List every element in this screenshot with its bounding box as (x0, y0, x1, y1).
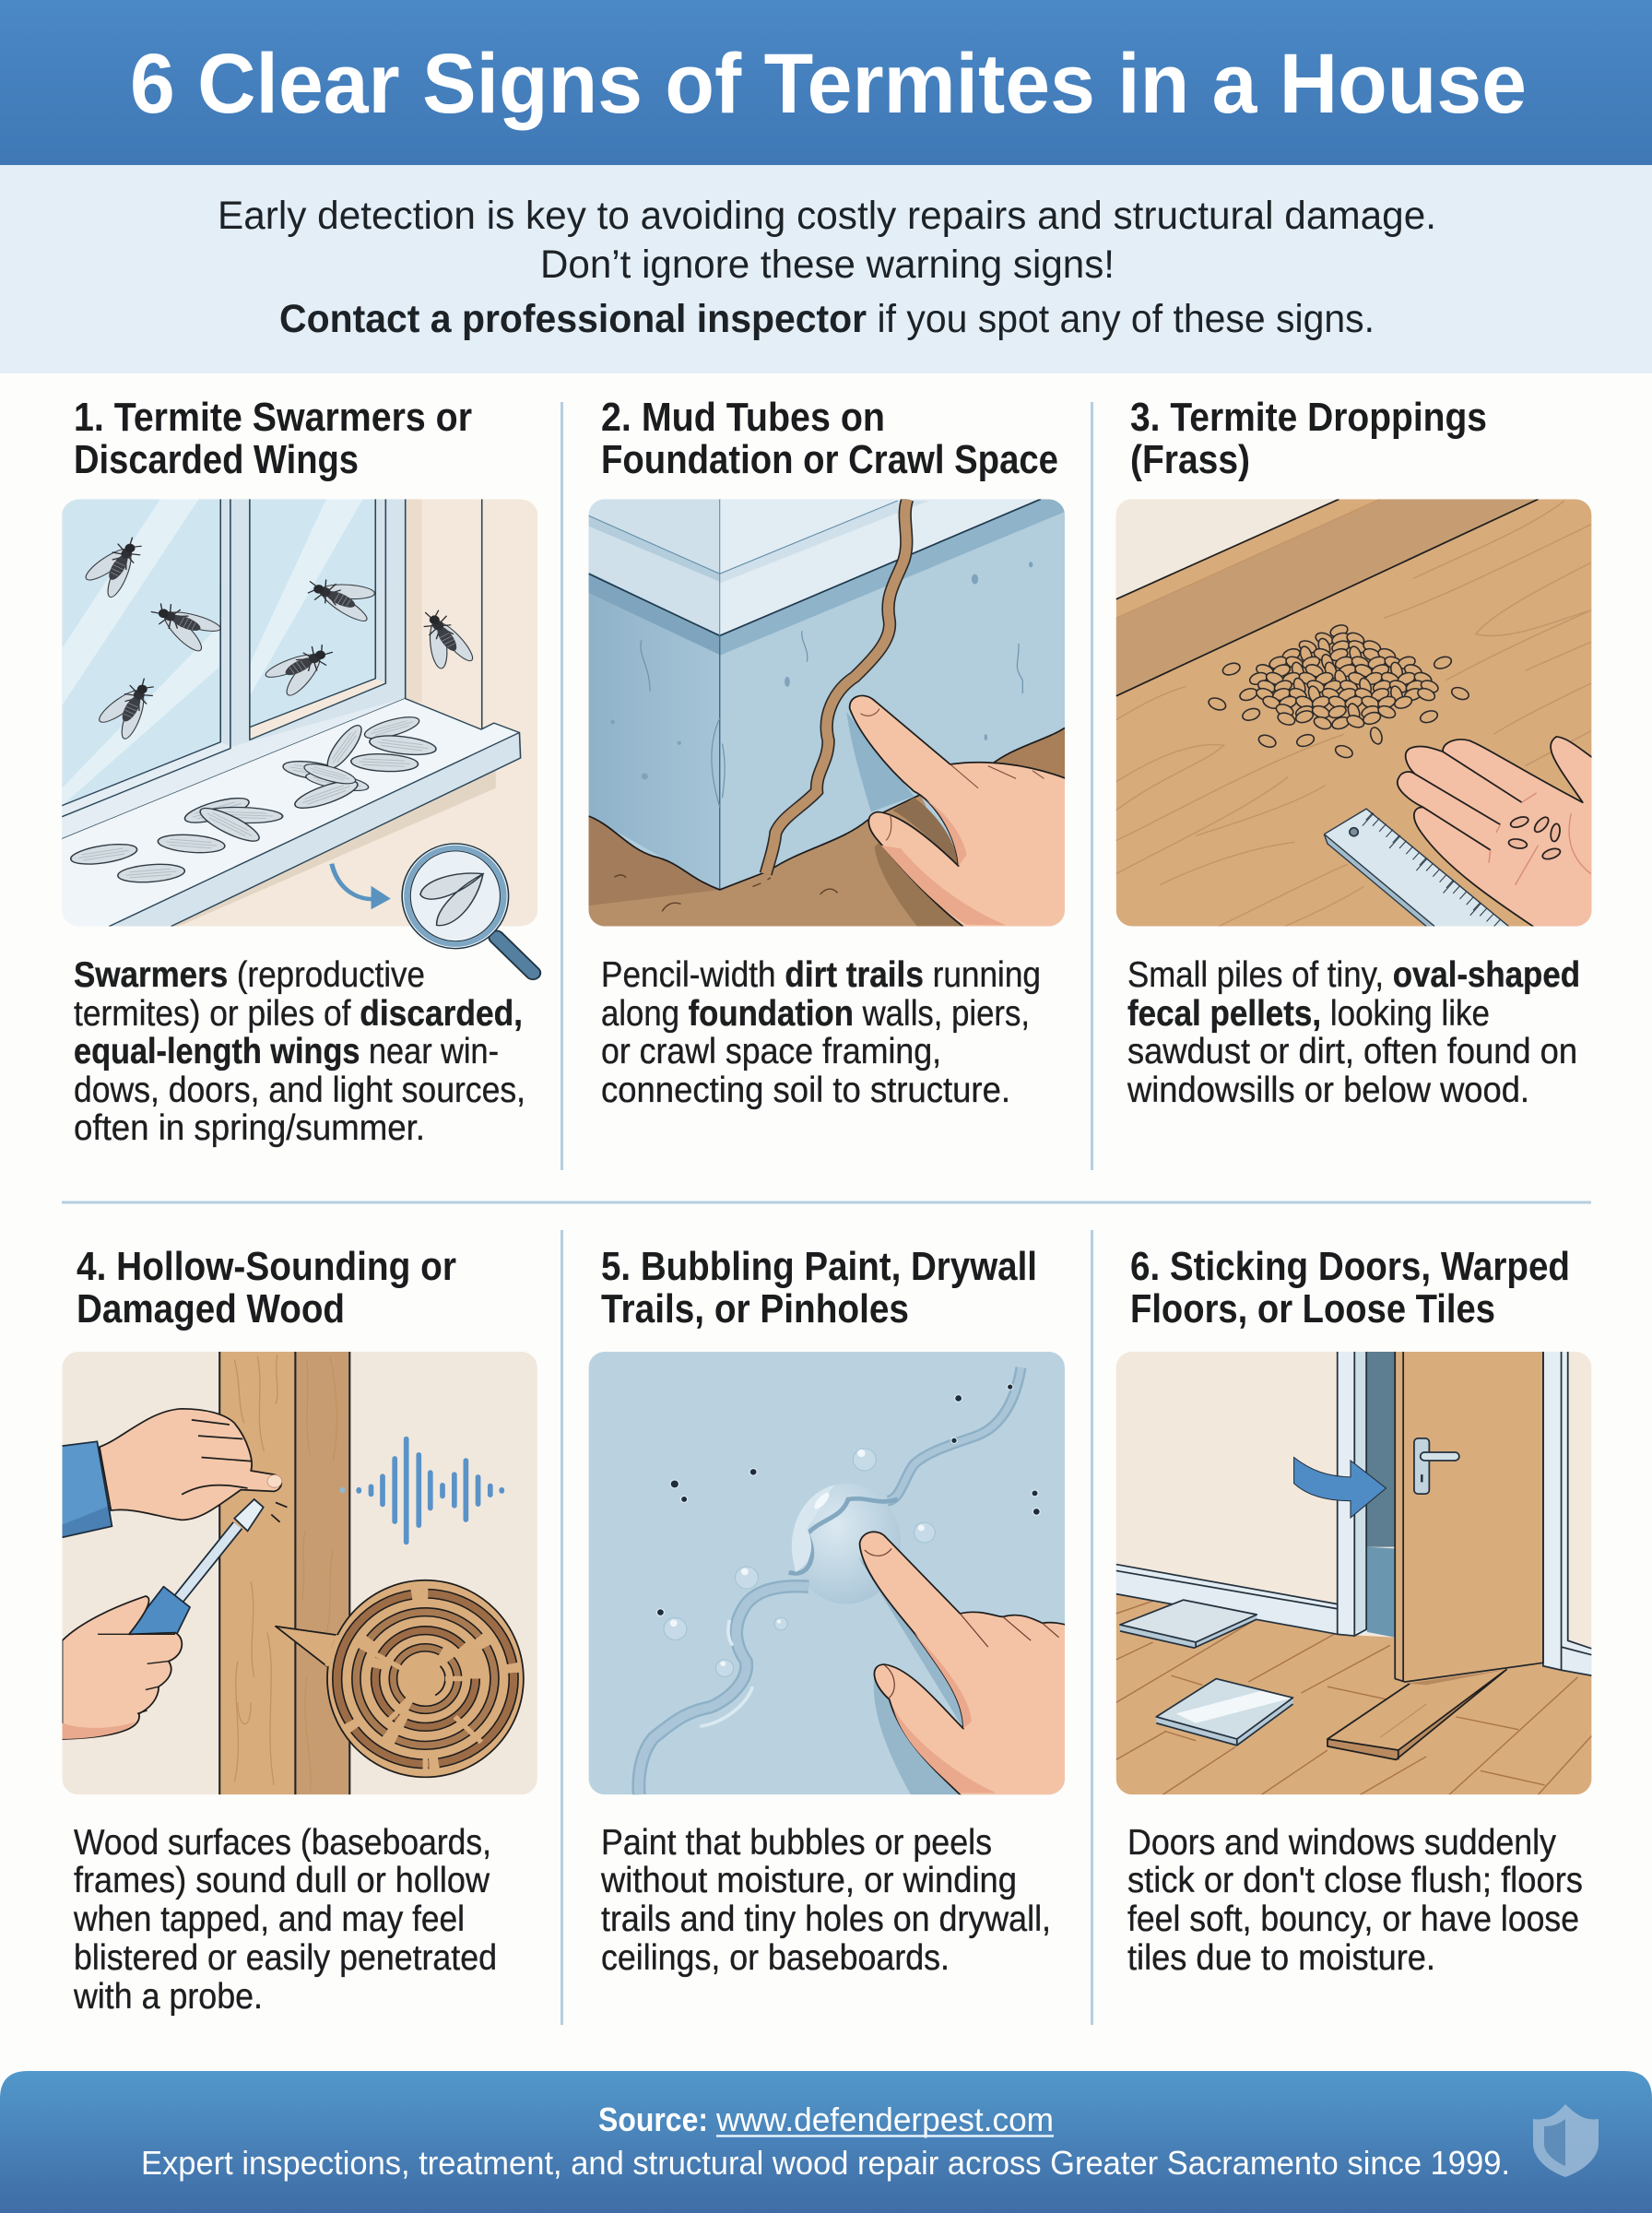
card 1 text: Swarmers (reproductive (74, 955, 425, 995)
card 3 text: Small piles of tiny, oval-shaped (1127, 955, 1580, 995)
icon: door handle (1414, 1438, 1459, 1494)
card 2 text: Pencil-width dirt trails running (601, 955, 1041, 995)
card 3 text: windowsills or below wood. (1127, 1071, 1529, 1110)
card 1 text: equal-length wings near win- (74, 1032, 499, 1071)
icon: sound wave (342, 1439, 502, 1542)
card 4 text: blistered or easily penetrated (74, 1938, 497, 1978)
card 2 text: connecting soil to structure. (601, 1071, 1010, 1110)
illustration: frass pile on wood, ruler and hand (1115, 499, 1591, 926)
illustration: warped door, floor and loose tiles (1115, 1352, 1591, 1794)
illustration: mud tube on foundation with pointing hand (588, 499, 1065, 926)
card 3 text (1127, 955, 1580, 1110)
card 2 heading: 2. Mud Tubes on (601, 395, 885, 440)
card 3: frass (1116, 395, 1598, 1110)
card 5: bubbling paint (589, 1244, 1070, 1978)
card 2 text: along foundation walls, piers, (601, 994, 1030, 1034)
card 1 text (74, 955, 525, 1148)
intro band: Contact a professional inspector if you spot any of these signs. (279, 297, 1375, 341)
card 2 heading (601, 395, 1058, 482)
card 5 text (600, 1823, 1051, 1978)
card 2 heading: Foundation or Crawl Space (601, 437, 1058, 482)
card 6 text: feel soft, bouncy, or have loose (1127, 1899, 1579, 1939)
card 6 heading (1130, 1244, 1570, 1331)
icon: damaged wood maze callout (276, 1580, 524, 1777)
card 4 heading (77, 1244, 456, 1331)
card 4 text: frames) sound dull or hollow (74, 1861, 490, 1900)
source line: www.defenderpest.com (715, 2101, 1054, 2138)
card 1: swarmers (62, 395, 537, 1148)
header band with title (0, 0, 1652, 165)
icon: blue arrow (1294, 1458, 1386, 1518)
card 3 heading (1130, 395, 1487, 482)
card 3 heading: (Frass) (1130, 437, 1250, 482)
card 1 heading (74, 395, 472, 482)
card 5 heading (601, 1244, 1037, 1331)
illustration: bubbled paint, trails, pinholes and hand (588, 1352, 1065, 1794)
card 4 heading: 4. Hollow-Sounding or (77, 1244, 456, 1289)
card 4 heading: Damaged Wood (77, 1286, 345, 1331)
card 2 text: or crawl space framing, (601, 1032, 941, 1071)
tagline: Expert inspections, treatment, and structural wood repair across Greater Sacramento since 1999. (141, 2144, 1510, 2182)
card 2: mud tubes (584, 395, 1070, 1110)
intro band: Don’t ignore these warning signs! (540, 243, 1115, 287)
intro band: Early detection is key to avoiding costly repairs and structural damage. (218, 194, 1436, 238)
card 4: hollow wood (63, 1244, 537, 2017)
icon: shield (1533, 2104, 1599, 2177)
card 4 text: when tapped, and may feel (73, 1899, 465, 1939)
card 2 text (601, 955, 1041, 1110)
card 6 heading: 6. Sticking Doors, Warped (1130, 1244, 1570, 1289)
icon: curved arrow (332, 864, 391, 909)
card 1 text: dows, doors, and light sources, (74, 1071, 525, 1110)
card 1 text: often in spring/summer. (74, 1108, 425, 1148)
header band with title: 6 Clear Signs of Termites in a House (130, 37, 1527, 131)
card 5 text: without moisture, or winding (600, 1861, 1017, 1900)
card 5 text: Paint that bubbles or peels (601, 1823, 992, 1863)
illustration: tapping wood with screwdriver and maze cross-section (63, 1352, 537, 1794)
icon: magnifying glass (402, 844, 533, 973)
card 5 heading: Trails, or Pinholes (601, 1286, 909, 1331)
card 3 text: fecal pellets, looking like (1127, 994, 1490, 1034)
card 5 heading: 5. Bubbling Paint, Drywall (601, 1244, 1037, 1289)
card 6 text (1127, 1823, 1583, 1978)
intro band (0, 165, 1652, 373)
card 1 heading: 1. Termite Swarmers or (74, 395, 472, 440)
card 6: sticking doors (1116, 1244, 1591, 1978)
card 1 heading: Discarded Wings (74, 437, 359, 482)
card 6 heading: Floors, or Loose Tiles (1130, 1286, 1495, 1331)
card 4 text: with a probe. (73, 1977, 263, 2017)
card 4 text (73, 1823, 497, 2017)
illustration: termites at window and wings on sill (62, 499, 542, 981)
footer band (0, 2071, 1652, 2213)
icon: loose tiles (1120, 1600, 1292, 1746)
card 3 text: sawdust or dirt, often found on (1127, 1032, 1577, 1071)
card 6 text: stick or don't close flush; floors (1127, 1861, 1583, 1900)
source line: Source: (598, 2101, 708, 2138)
card 5 text: ceilings, or baseboards. (601, 1938, 950, 1978)
card 6 text: Doors and windows suddenly (1127, 1823, 1556, 1863)
card 4 text: Wood surfaces (baseboards, (74, 1823, 491, 1863)
card 5 text: trails and tiny holes on drywall, (601, 1899, 1051, 1939)
card 3 heading: 3. Termite Droppings (1130, 395, 1487, 440)
card 1 text: termites) or piles of discarded, (74, 994, 523, 1034)
card 6 text: tiles due to moisture. (1127, 1938, 1435, 1978)
